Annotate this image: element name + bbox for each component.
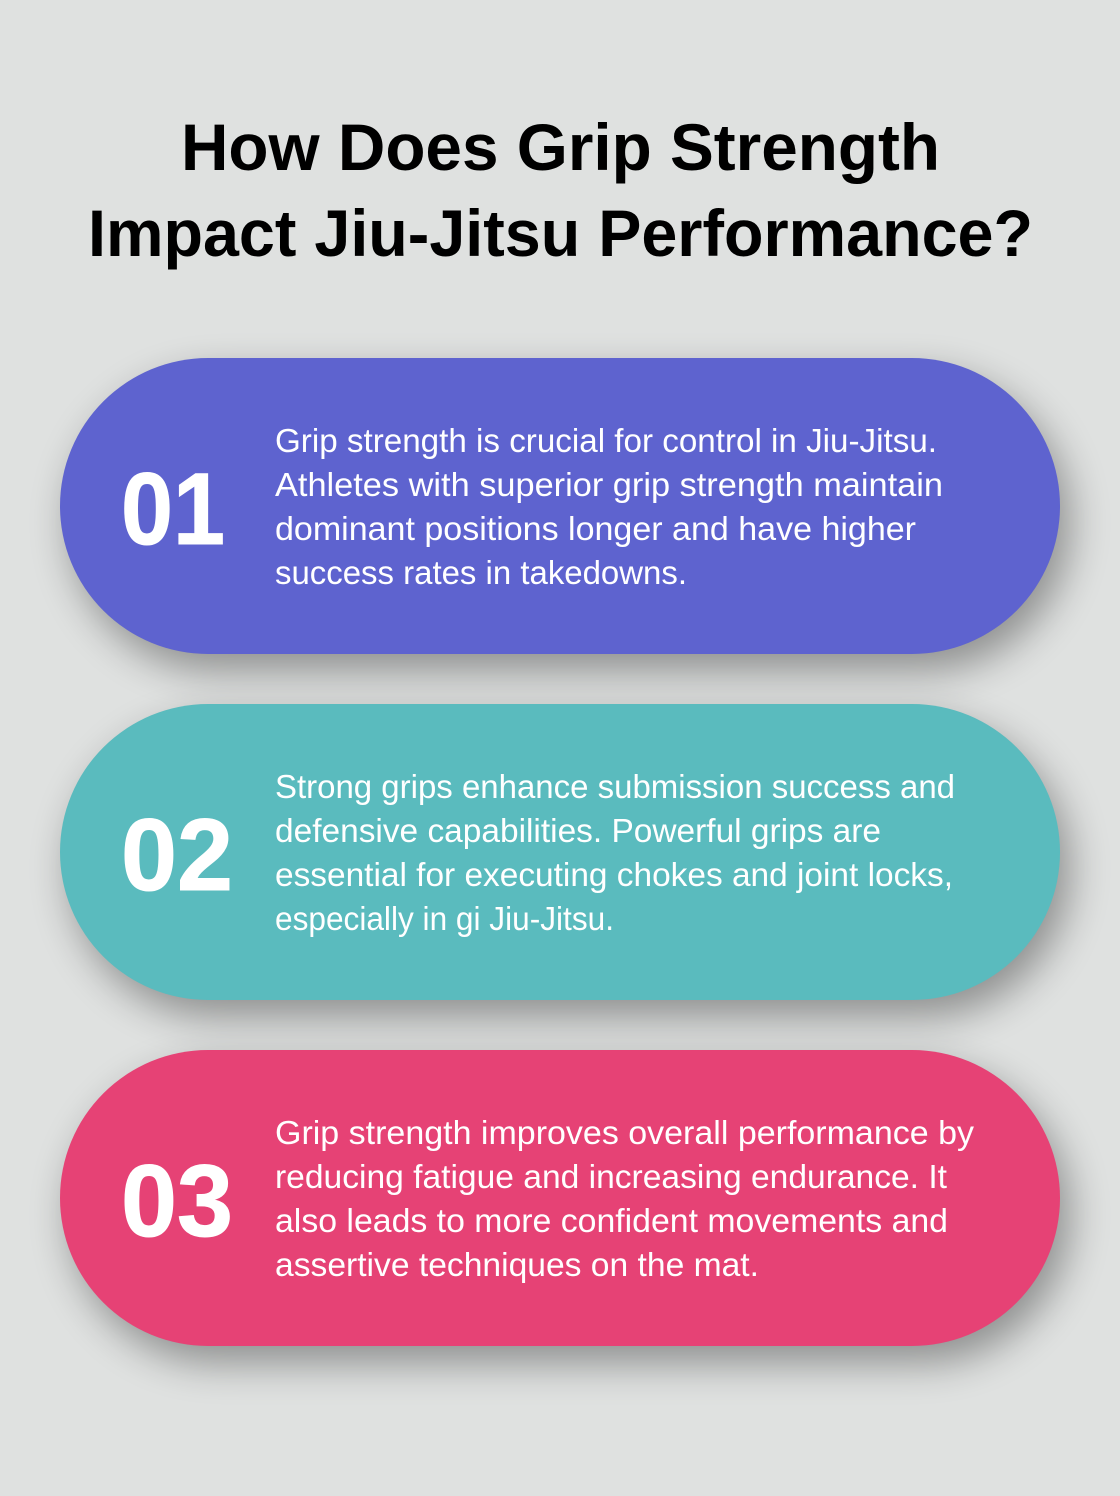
title: Impact Jiu-Jitsu Performance? xyxy=(88,196,1033,270)
text: step 02 description: essential for executing chokes and joint locks, xyxy=(275,856,953,893)
text: step 02 description: defensive capabilities. Powerful grips are xyxy=(275,812,881,849)
text: step 01 description: success rates in takedowns. xyxy=(275,554,687,591)
text: step 03 description: Grip strength improves overall performance by xyxy=(275,1114,975,1151)
text: step 02 description: Strong grips enhance submission success and xyxy=(275,768,955,805)
text: step 01 description: dominant positions longer and have higher xyxy=(275,510,916,547)
text: step 02 description xyxy=(275,768,955,937)
text: step 02 description: especially in gi Jiu-Jitsu. xyxy=(275,900,614,937)
panel: step 02 xyxy=(60,704,1070,1017)
number 02: 02 xyxy=(121,798,233,912)
number 01: 01 xyxy=(121,452,225,566)
text: step 03 description: assertive techniques on the mat. xyxy=(275,1246,759,1283)
text: step 01 description: Grip strength is crucial for control in Jiu-Jitsu. xyxy=(275,422,937,459)
text: step 03 description: reducing fatigue and increasing endurance. It xyxy=(275,1158,947,1195)
text: step 03 description xyxy=(275,1114,975,1283)
title xyxy=(88,110,1033,270)
number 03: 03 xyxy=(121,1144,233,1258)
text: step 01 description xyxy=(275,422,943,591)
text: step 01 description: Athletes with superior grip strength maintain xyxy=(275,466,943,503)
panel: step 01 xyxy=(60,358,1070,671)
text: step 03 description: also leads to more confident movements and xyxy=(275,1202,948,1239)
title: How Does Grip Strength xyxy=(181,110,940,184)
panel: step 03 xyxy=(60,1050,1070,1363)
